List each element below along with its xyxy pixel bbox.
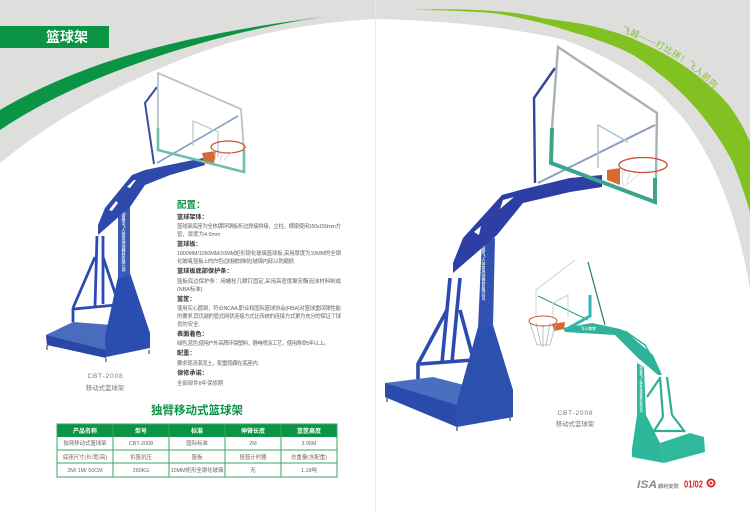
page number: 01/02 <box>684 480 703 490</box>
small teal basketball stand <box>529 260 705 463</box>
table row two <box>63 453 327 461</box>
large blue basketball stand <box>385 47 667 431</box>
right page header band <box>375 0 750 290</box>
table row three: 无 <box>250 467 256 474</box>
configuration text <box>177 200 342 387</box>
configuration text: 使用实心圆钢，符合NCAA,职业和国际篮球协会(FIBA)对篮球重回弹性能 <box>177 304 342 312</box>
table row one: 独臂移动式篮球架 <box>63 439 107 447</box>
configuration text: 配重： <box>177 349 196 357</box>
brand logo: ISA <box>637 479 657 491</box>
right caption: CBT-2008 <box>558 410 593 417</box>
section heading: 篮球架 <box>46 29 88 45</box>
table row one: 国际标准 <box>186 439 208 447</box>
rim and net <box>529 316 565 347</box>
left caption: 移动式篮球架 <box>86 383 125 392</box>
configuration text: 篮球架底座为全热镀锌钢板折边焊接拼接，立柱，横梁使用150x150mm方 <box>177 222 342 230</box>
icon: next page arrow <box>707 479 715 487</box>
configuration text: 员的安全. <box>177 320 200 328</box>
configuration text: 篮球架体： <box>177 213 208 221</box>
rim and bracket <box>202 141 245 163</box>
footer brand logo and page number <box>637 479 715 491</box>
rear support frame <box>418 278 473 388</box>
column with maker text <box>637 363 646 416</box>
configuration text: 管，厚度为4.0mm <box>177 230 221 238</box>
section heading <box>0 26 109 48</box>
telescopic arm <box>453 175 602 273</box>
left green swoosh <box>0 16 330 130</box>
product table <box>57 424 337 477</box>
rim and bracket <box>607 158 667 186</box>
left caption <box>86 373 125 392</box>
table header row: 型号 <box>135 427 147 435</box>
table row one: CBT-2008 <box>129 441 153 447</box>
configuration text: (NBA标准) <box>177 285 203 293</box>
column with maker text: 南昌市飞人体育运动器材有限公司 <box>481 241 486 301</box>
left caption: CBT-2008 <box>88 373 123 380</box>
column with maker text: 南昌市飞人体育运动器材有限公司 <box>638 365 642 413</box>
slogan along curve: 飞越——打比拼！飞人前向 <box>624 26 718 88</box>
configuration text: 全部部件8年保修期 <box>177 379 223 387</box>
configuration text: 篮筐： <box>177 295 196 303</box>
left page header band <box>0 0 375 163</box>
configuration text: 要求现浇混泥土，配重隐藏在底座内. <box>177 359 259 367</box>
table row three <box>67 466 318 474</box>
table row two: 底座尺寸(长/宽/高) <box>63 453 107 461</box>
backboard <box>536 260 605 330</box>
telescopic arm <box>98 158 205 235</box>
table row two: 总重量(含配重) <box>291 453 327 461</box>
pedestal <box>457 325 513 427</box>
table row three: 10MM矩形全钢化玻璃 <box>171 466 224 474</box>
backboard <box>158 73 244 172</box>
table header row: 伸臂长度 <box>241 427 265 435</box>
configuration text: 篮板底边保护条：用螺栓几颗钉固定,采用高密度聚安酯泡沫材料制成 <box>177 277 342 285</box>
configuration text: 篮球板： <box>177 240 202 248</box>
base <box>46 322 149 362</box>
table row three: 1.18吨 <box>301 466 318 474</box>
column with maker text <box>478 238 495 328</box>
base <box>660 433 705 463</box>
table row one: 3.05M <box>302 441 317 447</box>
configuration text: 表面着色： <box>177 330 208 338</box>
table row two: 篮板 <box>192 453 203 461</box>
table row one <box>63 439 317 447</box>
table row two: 扣篮抗压 <box>130 453 152 461</box>
table row two: 投篮计时器 <box>240 453 267 461</box>
table header row: 产品名称 <box>73 427 97 435</box>
product table title: 独臂移动式篮球架 <box>151 403 243 417</box>
configuration text: 绿色,蓝色,使用户外高质环保塑料，静电喷涂工艺，使用寿命5年以上。 <box>177 339 329 347</box>
configuration text: 化玻璃,篮板上的白色边线被烧制在玻璃内部,以防磨损. <box>177 257 295 265</box>
right caption: 移动式篮球架 <box>556 419 595 428</box>
table header row <box>73 427 321 435</box>
page divider <box>375 0 376 513</box>
table row one: 2M <box>249 441 257 447</box>
brand logo <box>637 479 679 491</box>
configuration text: 的要求.其优越的管式网状连接方式比传统的连接方式更为充分的保证了球 <box>177 312 342 320</box>
configuration text: 保修承诺： <box>177 369 208 377</box>
right green swoosh <box>413 9 750 212</box>
brand logo: 朗利安防 <box>658 482 679 490</box>
backboard brace <box>145 87 157 164</box>
column with maker text: 南昌市飞人体育运动器材有限公司 <box>122 211 126 273</box>
left blue basketball stand <box>46 73 245 362</box>
table header row: 标准 <box>191 427 203 435</box>
configuration heading: 配置： <box>177 200 206 211</box>
right caption <box>556 410 595 428</box>
column with maker text <box>118 206 130 279</box>
backboard brace <box>534 68 555 183</box>
table row three: 2M/ 1M/ 50CM <box>67 468 103 474</box>
table row three: 260KG <box>133 468 149 474</box>
pedestal <box>632 415 664 463</box>
pedestal <box>105 273 150 357</box>
base <box>385 377 510 431</box>
telescopic arm <box>563 323 662 375</box>
telescopic arm: 飞人体育 <box>580 325 596 331</box>
table header row: 篮筐高度 <box>297 427 321 435</box>
configuration text: 篮球板底部保护条： <box>177 267 233 275</box>
configuration text: 1800MM/1050MM/10MM矩形钢化玻璃篮球板,采用厚度为10MM的全钢 <box>177 249 341 257</box>
rear support frame <box>73 236 117 322</box>
backboard <box>551 47 657 202</box>
rear support frame <box>647 377 685 432</box>
